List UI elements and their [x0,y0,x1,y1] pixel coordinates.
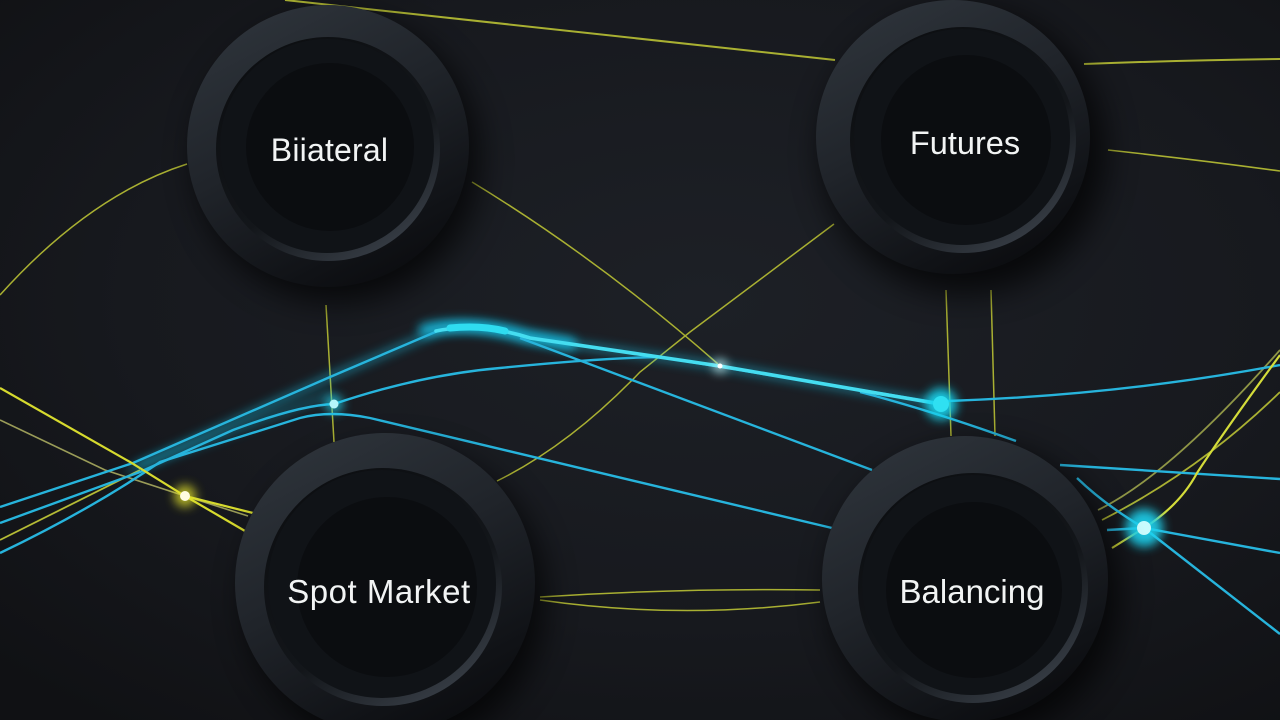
bright main trunk [436,327,940,404]
node: Spot Market [235,433,545,720]
glowing nodes [174,359,1163,547]
node: Balancing [822,436,1120,720]
label: Balancing: Balancing [900,573,1044,610]
node: Futures [816,0,1106,294]
node: Bilateral [187,5,480,302]
label: Spot Market: Spot Market [287,573,471,610]
bright yellow lines [0,355,1280,548]
blue lines [0,330,1280,634]
label: Bilateral: Biiateral [271,132,388,168]
blue glow under lines [130,326,940,470]
label: Futures: Futures [910,125,1020,161]
